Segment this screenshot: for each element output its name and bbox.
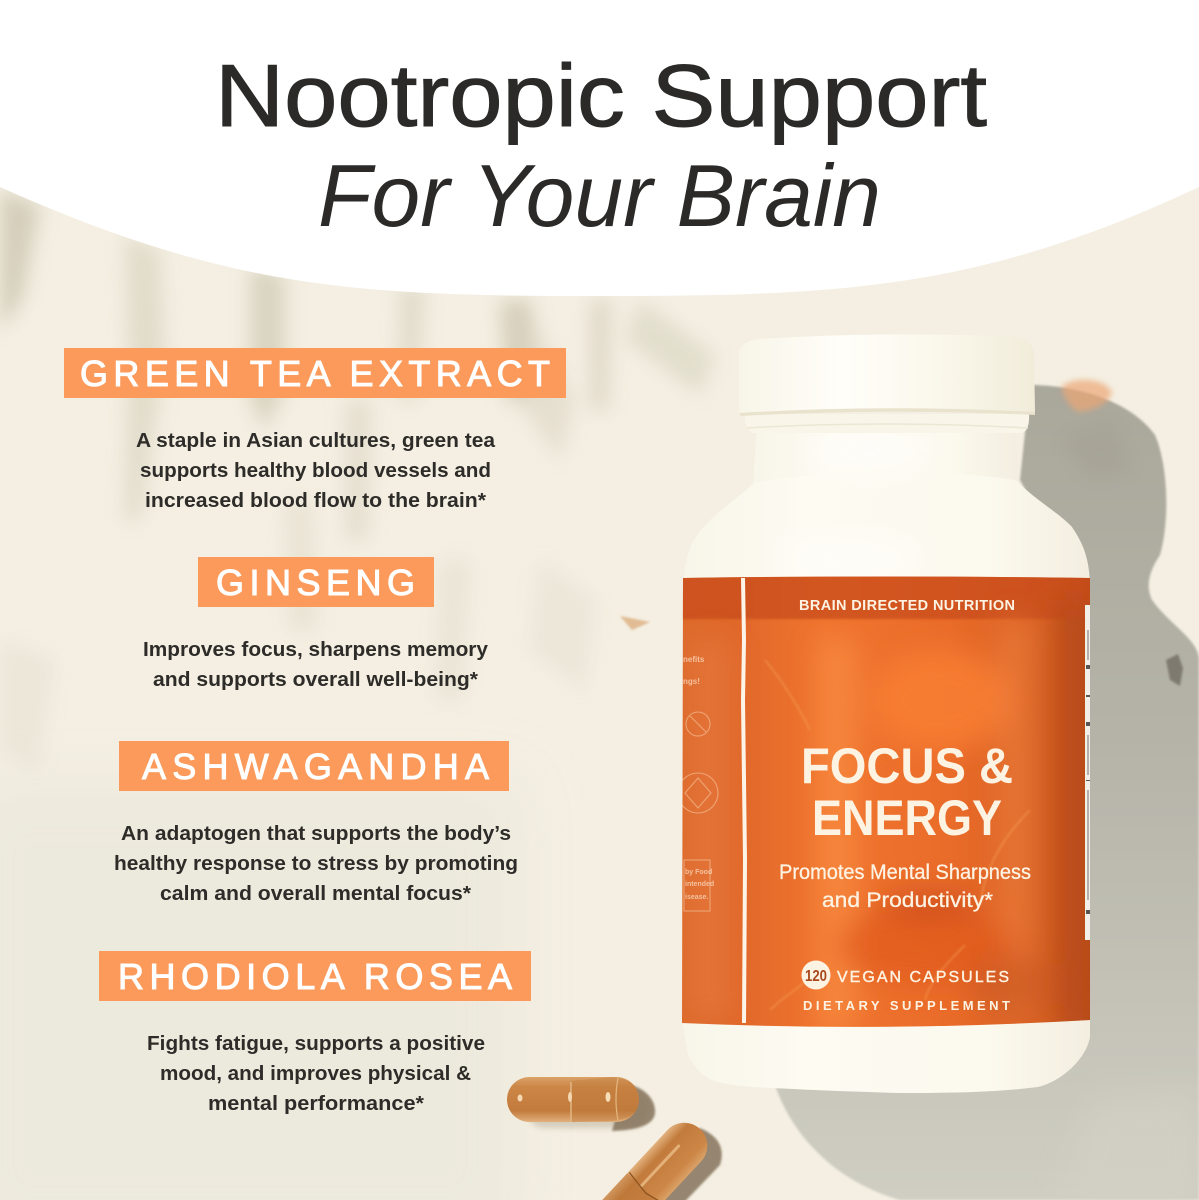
- description: healthy response to stress by promoting: [114, 853, 518, 875]
- label claim: [779, 861, 1031, 912]
- description: mood, and improves physical &: [160, 1063, 471, 1085]
- description: calm and overall mental focus*: [160, 883, 471, 905]
- description: supports healthy blood vessels and: [140, 460, 491, 482]
- orange label: [678, 570, 1093, 1035]
- top band: [680, 575, 1092, 619]
- label capsule count: [802, 960, 1009, 990]
- description: A staple in Asian cultures, green tea: [136, 430, 496, 452]
- bottle cast shadow: [775, 380, 1199, 1200]
- bottle neck: [753, 425, 1017, 484]
- orange stain on marble: [1062, 380, 1112, 412]
- description: [143, 639, 489, 691]
- description: and supports overall well-being*: [153, 669, 478, 691]
- title line 2: For Your Brain: [318, 146, 881, 245]
- label capsule count: VEGAN CAPSULES: [837, 969, 1009, 986]
- side panel small print: ngs!: [683, 677, 700, 686]
- label capsule count: 120: [805, 968, 827, 985]
- side panel badges: [678, 712, 718, 911]
- dark speck in shadow: [1166, 654, 1183, 686]
- description: Improves focus, sharpens memory: [143, 639, 489, 661]
- label product name: [801, 738, 1013, 846]
- description: mental performance*: [208, 1093, 424, 1115]
- ingredient: ashwagandha: [114, 741, 518, 905]
- description: An adaptogen that supports the body’s: [121, 823, 511, 845]
- ingredient: rhodiola rosea: [99, 951, 531, 1115]
- heading tag: GREEN TEA EXTRACT: [80, 353, 550, 394]
- barcode panel: [1085, 605, 1090, 940]
- capsules: [507, 1077, 722, 1200]
- label supplement line: DIETARY SUPPLEMENT: [803, 998, 1010, 1013]
- supplement bottle: [678, 334, 1093, 1093]
- ingredient: green tea extract: [64, 348, 566, 512]
- capsule 2: [602, 1122, 724, 1200]
- side panel small print: nefits: [683, 655, 705, 664]
- side panel small print: intended: [685, 881, 714, 888]
- side panel small print: by Food: [685, 869, 712, 876]
- description: [147, 1033, 485, 1115]
- heading tag: ASHWAGANDHA: [142, 746, 489, 787]
- title line 1: Nootropic Support: [215, 46, 987, 145]
- description: [136, 430, 496, 512]
- description: increased blood flow to the brain*: [145, 490, 486, 512]
- label seam: [743, 578, 745, 1023]
- white title dome: [0, 0, 1199, 296]
- bottle body: [682, 473, 1090, 1093]
- label product name: FOCUS &: [801, 738, 1013, 794]
- bottle cap: [739, 334, 1035, 414]
- ingredient: ginseng: [143, 557, 489, 691]
- description: Fights fatigue, supports a positive: [147, 1033, 485, 1055]
- label claim: Promotes Mental Sharpness: [779, 861, 1031, 884]
- title: [215, 46, 987, 245]
- label product name: ENERGY: [812, 790, 1002, 846]
- description: [114, 823, 518, 905]
- marble background with leaf shadows: [0, 189, 714, 1174]
- heading tag: GINSENG: [216, 562, 415, 603]
- label brand line: BRAIN DIRECTED NUTRITION: [799, 598, 1015, 614]
- side panel small print: isease.: [685, 894, 708, 901]
- cap ring: [745, 414, 1029, 433]
- capsule 1: [507, 1077, 655, 1131]
- label claim: and Productivity*: [822, 889, 993, 912]
- side panel small print: [683, 655, 714, 901]
- heading tag: RHODIOLA ROSEA: [118, 956, 512, 997]
- heading tag: [198, 557, 434, 607]
